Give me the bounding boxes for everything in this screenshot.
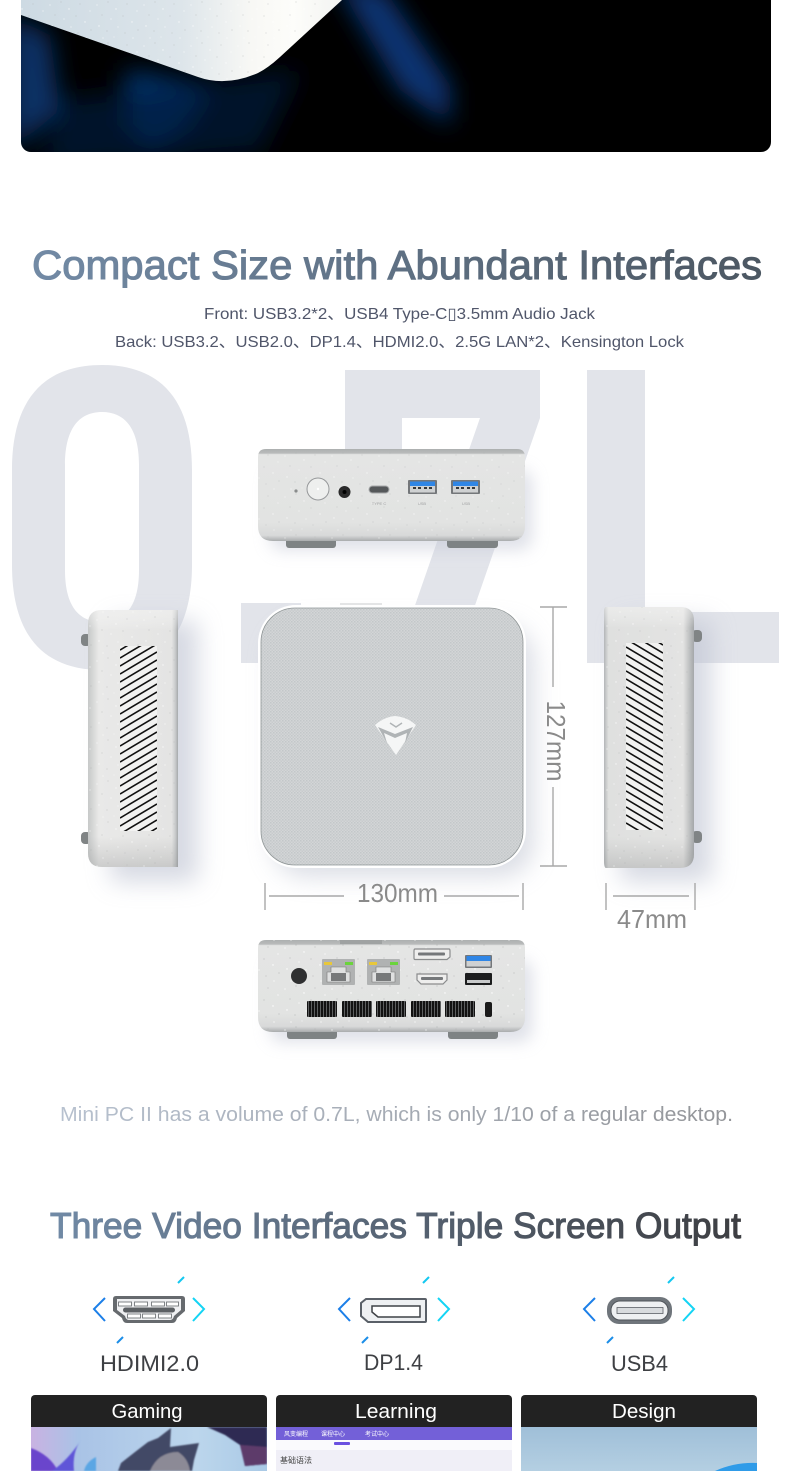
port captions: TYPE C <box>372 501 386 506</box>
side vent <box>626 643 663 830</box>
gaming header <box>31 1395 267 1427</box>
dimension: 130mm width <box>265 878 523 910</box>
device: left side view <box>81 610 198 882</box>
interface: HDMI <box>94 1277 204 1376</box>
background numeral 0.7L <box>12 365 779 670</box>
vents <box>307 1001 475 1017</box>
USB4 chevrons and accents <box>584 1277 694 1343</box>
dimension: 47mm depth: 47mm <box>617 904 687 934</box>
title: compact size: Compact Size with Abundant Interfaces <box>32 242 762 288</box>
USB-C connector icon <box>607 1297 672 1324</box>
learning screenshot: 基础语法 <box>280 1455 312 1465</box>
learning screenshot: 考试中心 <box>365 1430 389 1438</box>
feet <box>286 536 498 548</box>
LAN port 1 <box>322 959 355 985</box>
USB 2 port <box>465 973 492 985</box>
learning screenshot: 风变编程 <box>284 1430 308 1438</box>
DisplayPort <box>414 949 450 960</box>
device: back view <box>258 940 532 1042</box>
side vent <box>120 646 157 831</box>
title: triple screen: Three Video Interfaces Triple Screen Output <box>50 1205 741 1246</box>
card: learning: Learning <box>355 1401 437 1423</box>
hero device corner <box>21 0 342 81</box>
HDMI port <box>417 974 447 984</box>
learning screenshot: 课程中心 <box>321 1430 345 1438</box>
blue light beams <box>10 0 450 170</box>
USB4 label: USB4 <box>611 1351 668 1376</box>
design artwork <box>521 1427 757 1471</box>
HDMI connector icon <box>113 1296 185 1323</box>
HDMI label: HDIMI2.0 <box>100 1351 199 1376</box>
interface: DisplayPort <box>339 1277 449 1375</box>
USB 3 port <box>465 955 492 968</box>
design header <box>521 1395 757 1427</box>
LAN port 2 <box>367 959 400 985</box>
device: front view <box>258 449 532 550</box>
USB port 2 <box>451 480 480 494</box>
DP chevrons and accents <box>339 1277 449 1343</box>
gaming artwork <box>31 1427 267 1471</box>
LED <box>294 489 298 493</box>
caption: Mini PC II has a volume of 0.7L, which is only 1/10 of a regular desktop. <box>60 1104 733 1126</box>
card: learning <box>276 1395 512 1471</box>
device: right side view <box>604 607 712 882</box>
feet <box>287 1028 498 1039</box>
card: design: Design <box>612 1401 676 1423</box>
learning header <box>276 1395 512 1427</box>
card: gaming: Gaming <box>112 1401 182 1423</box>
subtitle: back ports: Back: USB3.2、USB2.0、DP1.4、HDMI2.0、2.5G LAN*2、Kensington Lock <box>115 334 685 351</box>
learning screenshot <box>276 1427 512 1471</box>
power jack <box>291 968 307 984</box>
mesh panel <box>261 608 523 865</box>
port captions: USB <box>462 501 470 506</box>
card: design <box>521 1395 757 1471</box>
rubber pegs <box>81 634 91 844</box>
DP label: DP1.4 <box>364 1350 423 1375</box>
card: gaming <box>31 1395 267 1471</box>
dimension: 130mm width: 130mm <box>357 878 438 908</box>
dimension: 127mm height <box>540 607 571 866</box>
audio jack <box>338 486 350 498</box>
DP connector icon <box>361 1299 426 1322</box>
rubber pegs <box>692 630 702 843</box>
Type-C port <box>369 486 389 493</box>
logo <box>375 716 416 755</box>
interface: USB4 <box>584 1277 694 1376</box>
dimension: 47mm depth <box>606 883 695 934</box>
dimension: 127mm height: 127mm <box>541 700 571 782</box>
subtitle: front ports: Front: USB3.2*2、USB4 Type-C▯3.5mm Audio Jack <box>204 306 596 323</box>
USB port 1 <box>408 480 437 494</box>
port captions <box>372 501 470 506</box>
power button <box>307 478 329 500</box>
HDMI chevrons and accents <box>94 1277 204 1343</box>
port captions: USB <box>418 501 426 506</box>
device: top view <box>258 603 534 877</box>
Kensington lock <box>485 1002 492 1017</box>
hero photo: device over blue light beams <box>21 0 771 152</box>
